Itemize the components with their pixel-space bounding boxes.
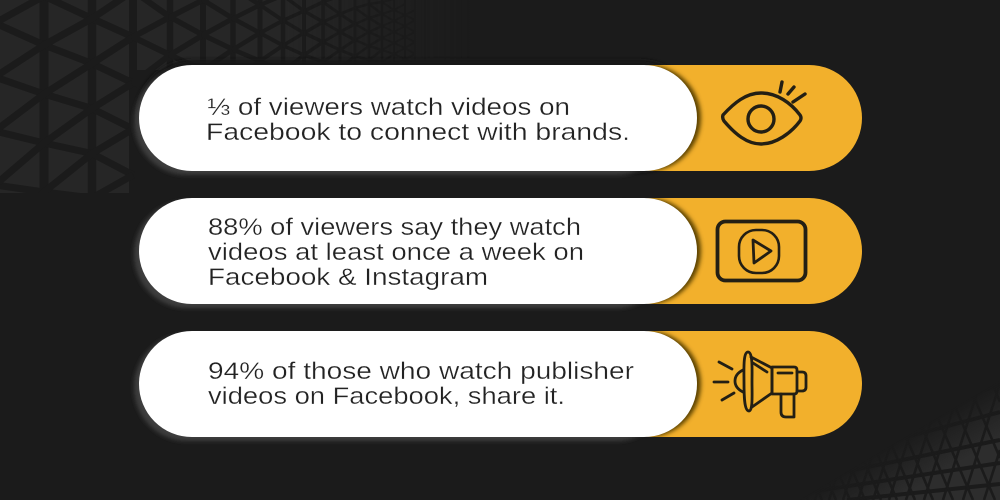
icon: eye: [723, 82, 805, 144]
pill: white text backing: [139, 198, 697, 304]
pill: orange icon backing: [600, 65, 862, 171]
panel: publisher video sharing: [134, 331, 862, 441]
text: 88 percent of viewers: 88% of viewers say they watch: [208, 214, 581, 241]
pill halo: [134, 60, 696, 175]
pill: orange icon backing: [600, 331, 862, 437]
background pattern: top-left triangles: [0, 0, 321, 193]
background pattern: bottom-right triangles: [845, 408, 1000, 500]
text: one third of viewers: Facebook to connect with brands.: [206, 119, 630, 146]
pill: white text backing: [139, 331, 697, 437]
pill shadow on orange: [648, 65, 704, 171]
pill: orange icon backing: [600, 198, 862, 304]
icon: video player: [718, 222, 806, 280]
text: 94 percent share: [208, 358, 634, 410]
text: 88 percent of viewers: Facebook & Instagram: [208, 264, 488, 291]
text: 94 percent share: 94% of those who watch publisher: [208, 358, 634, 385]
pill shadow on orange: [648, 331, 704, 437]
pill halo: [134, 201, 669, 308]
pill shadow on orange: [648, 198, 704, 304]
panel: weekly viewers: [134, 198, 862, 308]
text: 88 percent of viewers: [208, 214, 584, 291]
text: 88 percent of viewers: videos at least once a week on: [208, 239, 584, 266]
panel: Facebook brand connection: [134, 60, 862, 175]
pill halo: [134, 334, 669, 441]
text: one third of viewers: [206, 94, 630, 146]
text: 94 percent share: videos on Facebook, share it.: [208, 383, 565, 410]
text: one third of viewers: ⅓ of viewers watch videos on: [207, 94, 570, 121]
pill: white text backing: [139, 65, 697, 171]
icon: megaphone: [714, 352, 806, 417]
